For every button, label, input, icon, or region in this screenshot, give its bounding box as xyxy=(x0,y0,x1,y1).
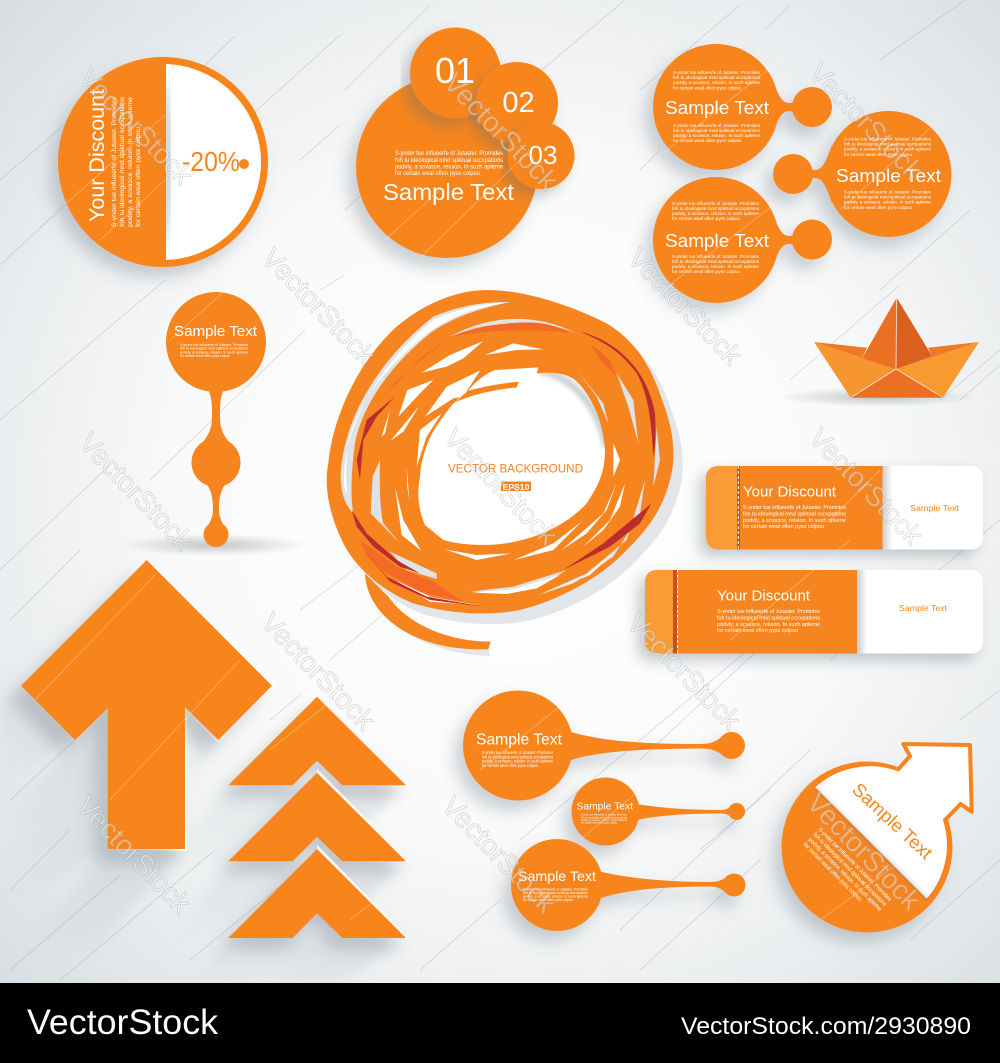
watermarks: VectorStock xyxy=(71,790,198,920)
watermarks: VectorStock xyxy=(73,62,200,192)
shape xyxy=(228,773,406,861)
bubble shape xyxy=(653,44,832,170)
heading: Sample Text xyxy=(518,868,596,884)
watermarks: VectorStock xyxy=(436,790,563,920)
body text bottom: S-ynder tue influeerfe of Jutaster. Promides xyxy=(672,254,759,259)
coupon body: foh tu ideological mnd spiktual occxpations xyxy=(717,616,820,622)
center title: VECTOR BACKGROUND xyxy=(448,462,583,476)
back left wing xyxy=(814,342,896,369)
connector bubble 2 xyxy=(773,111,952,237)
connector bubble 1 xyxy=(653,44,832,170)
body text bottom: podvly, a scvasce, reluion. In suzh apleme xyxy=(844,200,932,204)
connector bubble 3 xyxy=(653,177,832,303)
body text top: for certain weal often pyss colpou xyxy=(844,152,912,157)
coupon body: foh tu ideological mnd spiktual occxpations xyxy=(743,512,846,518)
numbered circles xyxy=(356,28,574,258)
percent: -20% xyxy=(182,146,240,177)
discount circle xyxy=(58,57,268,267)
body: for certain weal often pyss colpou xyxy=(482,763,538,768)
coupon label: Sample Text xyxy=(910,503,960,513)
body text: foh tu ideological mnd spiktual occxpations xyxy=(395,157,503,164)
coupon 1 xyxy=(706,466,983,550)
front bottom panel xyxy=(851,369,943,398)
coupon body: S-ynder tue influeerfe of Jutaster. Promides xyxy=(743,505,846,511)
coupon label: Sample Text xyxy=(899,603,948,613)
body text top xyxy=(844,136,932,157)
discount body text: for certain weal often pyss colpou xyxy=(135,127,142,227)
body text bottom: for certain weal often pyss colpou xyxy=(844,205,912,210)
lollipop 1 xyxy=(463,690,745,800)
coupon card xyxy=(645,570,983,654)
badge body: foh tu ideological mnd spiktual occxpations xyxy=(812,832,887,908)
colour bands dark orange xyxy=(360,323,617,602)
left sail xyxy=(862,298,897,369)
foreground diagonal highlights xyxy=(35,60,950,920)
pin shape xyxy=(166,292,266,547)
footer brand: VectorStock xyxy=(27,1003,219,1042)
heading: Sample Text xyxy=(836,165,941,186)
gaps white xyxy=(344,303,625,605)
white edge xyxy=(108,557,275,851)
badge heading: Sample Text xyxy=(848,779,937,863)
tail shadow xyxy=(377,597,490,656)
body text: S-ynder tue influeerfe of Jutaster. Promides xyxy=(395,150,503,157)
back right wing xyxy=(896,342,979,369)
watermarks: VectorStock xyxy=(438,422,565,552)
coupon body: podvly, a scvasce, reluion. In suzh apleme xyxy=(717,622,820,628)
coupon body: S-ynder tue influeerfe of Jutaster. Promides xyxy=(717,609,820,615)
body text bottom xyxy=(673,123,761,143)
scribble circle xyxy=(327,290,683,656)
heading: Sample Text xyxy=(476,732,563,748)
body text top: podvly, a scvasce, reluion. In suzh apleme xyxy=(673,80,761,85)
body text bottom xyxy=(672,254,760,274)
white arrow panel xyxy=(812,744,972,902)
body text bottom: foh tu ideological mnd spiktual occxpations xyxy=(844,194,931,200)
body text top: podvly, a scvasce, reluion. In suzh apleme xyxy=(844,146,932,152)
coupon body xyxy=(717,609,820,634)
body text bottom: podvly, a scvasce, reluion. In suzh apleme xyxy=(672,264,760,269)
colour bands red xyxy=(352,332,656,607)
body text top: podvly, a scvasce, reluion. In suzh apleme xyxy=(672,211,760,216)
body: foh tu ideological mnd spiktual occxpations xyxy=(482,754,554,759)
footer bar xyxy=(0,983,1000,1063)
circle 02 xyxy=(476,62,558,144)
body text top: for certain weal often pyss colpou xyxy=(673,86,741,90)
chevron 2 xyxy=(228,769,410,862)
tail xyxy=(365,573,491,649)
gaps grey xyxy=(341,302,660,595)
body: podvly, a scvasce, reluion. In suzh apleme xyxy=(482,759,553,764)
watermarks: VectorStock xyxy=(438,67,565,197)
coupon fills xyxy=(645,570,867,654)
coupon fills xyxy=(706,466,892,550)
watermarks: VectorStock xyxy=(255,607,382,737)
coupon body: podvly, a scvasce, reluion. In suzh apleme xyxy=(743,518,846,524)
big disc xyxy=(356,76,538,258)
body: S-ynder tue influeerfe of Jutaster. Promides xyxy=(523,887,588,892)
body text bottom: podvly, a scvasce, reluion. In suzh apleme xyxy=(673,133,761,138)
number 01: 01 xyxy=(435,50,475,91)
right sail xyxy=(896,298,932,369)
fold shade xyxy=(812,790,927,904)
scribble shadow xyxy=(336,301,683,624)
lollipop 3 xyxy=(511,839,746,931)
coupon body: for certain weal often pyss colpou xyxy=(743,524,824,530)
shape xyxy=(463,690,745,800)
white edge xyxy=(317,769,410,862)
body text bottom: S-ynder tue influeerfe of Jutaster. Promides xyxy=(673,123,760,128)
orange disc xyxy=(58,57,268,267)
lollipop 2 xyxy=(572,778,745,846)
body text top: S-ynder tue influeerfe of Jutaster. Promides xyxy=(844,136,931,142)
body text bottom: foh tu ideological mnd spiktual occxpations xyxy=(672,259,759,264)
body: podvly, a scvasce, reluion. In suzh apleme xyxy=(523,893,589,898)
white panel xyxy=(166,60,266,264)
white edge xyxy=(317,845,410,939)
watermarks: VectorStock xyxy=(803,422,930,552)
arrow shape xyxy=(21,560,272,849)
front right panel xyxy=(896,342,979,398)
watermarks: VectorStock xyxy=(801,787,928,917)
coupon body xyxy=(743,505,846,530)
circle 01 xyxy=(410,28,501,118)
body text top: foh tu ideological mnd spiktual occxpations xyxy=(844,142,931,146)
body xyxy=(523,887,589,902)
ground shadow xyxy=(122,534,306,556)
chevron 3 xyxy=(228,845,410,939)
watermarks: VectorStock xyxy=(803,57,930,187)
body text bottom: S-ynder tue influeerfe of Jutaster. Promides xyxy=(844,190,931,194)
pin diagram xyxy=(122,292,306,556)
body text top: S-ynder tue influeerfe of Jutaster. Promides xyxy=(672,201,759,206)
body text: podvly, a scvasce, reluion. In suzh apleme xyxy=(180,349,248,354)
number 03: 03 xyxy=(529,140,557,170)
body text xyxy=(180,342,248,358)
long shadows xyxy=(0,686,406,983)
bubble shape xyxy=(773,111,952,237)
discount body text xyxy=(111,96,142,227)
body text top: foh tu ideological mnd spiktual occxpations xyxy=(672,206,759,211)
shape xyxy=(228,849,406,938)
bubble shape xyxy=(653,177,832,303)
body text xyxy=(395,150,504,177)
badge body: for certain weal often pyss colpou xyxy=(802,842,863,903)
boat shadow xyxy=(778,387,978,407)
coupon heading: Your Discount xyxy=(717,588,811,604)
body: for certain weal often pyss colpou xyxy=(581,821,617,825)
body text top: for certain weal often pyss colpou xyxy=(672,216,740,221)
heading: Sample Text xyxy=(576,802,633,812)
body text top xyxy=(673,70,761,90)
body: S-ynder tue influeerfe of Jutaster. Promides xyxy=(482,750,554,755)
body text top: S-ynder tue influeerfe of Jutaster. Promides xyxy=(673,70,760,75)
heading: Sample Text xyxy=(383,179,515,205)
chevron 1 xyxy=(228,697,406,785)
coupon 2 xyxy=(645,570,983,654)
body xyxy=(482,750,554,768)
watermarks: VectorStock xyxy=(256,242,383,372)
body: for certain weal often pyss colpou xyxy=(523,897,573,902)
heading: Sample Text xyxy=(665,97,769,118)
main ring xyxy=(327,290,673,613)
badge body: S-ynder tue influeerfe of Jutaster. Promides xyxy=(817,827,892,903)
watermarks xyxy=(71,57,930,920)
watermarks: VectorStock xyxy=(621,607,748,737)
circle 03 xyxy=(508,122,574,189)
body text: for certain weal often pyss colpou xyxy=(395,170,481,177)
big up arrow xyxy=(21,557,275,851)
body text: for certain weal often pyss colpou xyxy=(180,353,230,358)
fold lines xyxy=(851,298,943,398)
discount label: Your Discount xyxy=(85,89,109,222)
body: podvly, a scvasce, reluion. In suzh apleme xyxy=(581,818,627,822)
body: S-ynder tue influeerfe of Jutaster. Promides xyxy=(581,813,627,817)
number 02: 02 xyxy=(502,87,535,119)
body text: S-ynder tue influeerfe of Jutaster. Promides xyxy=(180,342,248,347)
loose stroke end xyxy=(453,382,519,403)
centre hole xyxy=(418,367,605,545)
orange lower part xyxy=(804,787,927,910)
coupon body: for certain weal often pyss colpou xyxy=(717,628,798,634)
heading: Sample Text xyxy=(665,230,769,251)
body text bottom xyxy=(844,190,932,210)
badge body: podvly, a scvasce, reluion. In suzh apleme xyxy=(807,837,883,913)
discount body text: foh tu ideological mnd spiktual occxpations xyxy=(119,96,126,227)
discount body text: podvly, a scvasce, reluion. In suzh apleme xyxy=(127,97,134,227)
orange disc xyxy=(782,762,952,932)
front left panel xyxy=(814,342,896,398)
body text: podvly, a scvasce, reluion. In suzh apleme xyxy=(395,164,504,170)
body text bottom: foh tu ideological mnd spiktual occxpations xyxy=(673,128,760,133)
coupon heading: Your Discount xyxy=(743,484,837,500)
body xyxy=(581,813,627,825)
dot xyxy=(239,159,249,169)
arrow badge xyxy=(782,744,972,932)
watermarks: VectorStock xyxy=(622,242,749,372)
body: foh tu ideological mnd spiktual occxpations xyxy=(581,815,627,819)
body text bottom: for certain weal often pyss colpou xyxy=(672,269,740,274)
heading: Sample Text xyxy=(174,324,257,340)
body: foh tu ideological mnd spiktual occxpations xyxy=(523,890,588,895)
body text top: foh tu ideological mnd spiktual occxpations xyxy=(673,75,760,80)
body text bottom: for certain weal often pyss colpou xyxy=(673,138,741,143)
EPS10 badge: EPS10 xyxy=(503,482,530,492)
shape xyxy=(572,778,745,846)
body text top xyxy=(672,201,760,221)
shape xyxy=(511,839,746,931)
watermarks: VectorStock xyxy=(73,427,200,557)
discount body text: S-ynder tue influeerfe of Jutaster. Promides xyxy=(111,96,118,227)
hole inner shade xyxy=(540,371,606,447)
footer id: VectorStock.com/2930890 xyxy=(681,1013,971,1040)
coupon card xyxy=(706,466,983,550)
body text: foh tu ideological mnd spiktual occxpations xyxy=(180,346,248,351)
paper boat xyxy=(778,298,979,407)
